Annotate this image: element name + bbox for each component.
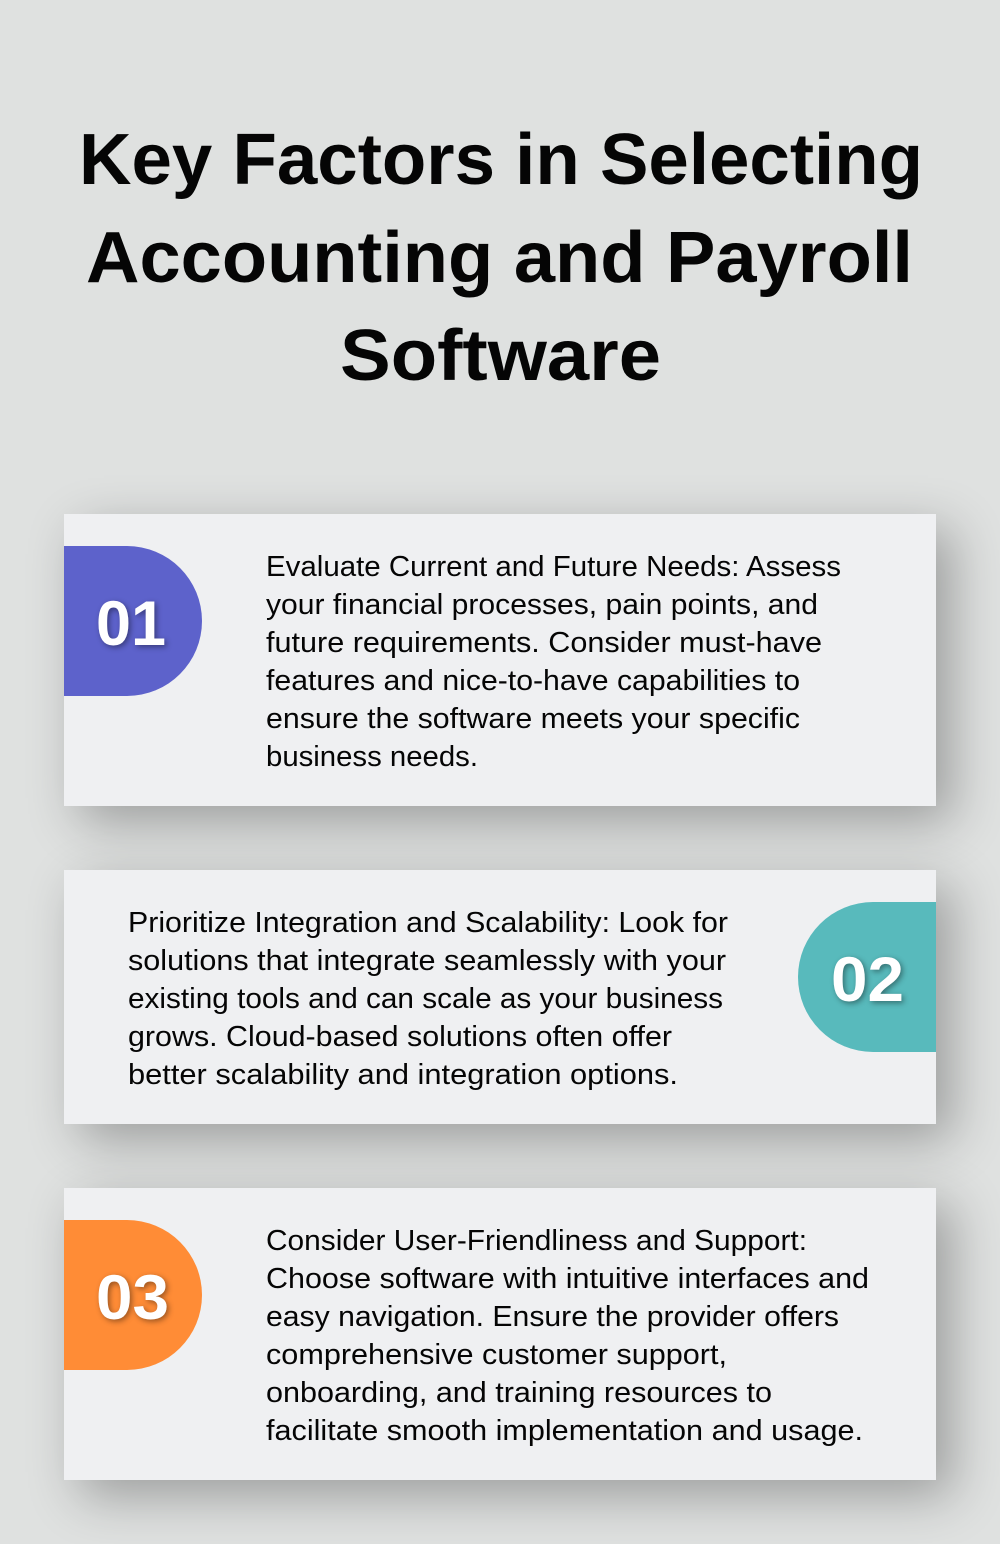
title: Software <box>340 316 661 396</box>
text: prioritize integration and scalability: existing tools and can scale as your business <box>128 983 723 1015</box>
text: evaluate current and future needs: ensure the software meets your specific <box>266 703 800 735</box>
text: prioritize integration and scalability: grows. Cloud-based solutions often offer <box>128 1021 673 1053</box>
badge: 03 <box>64 1220 202 1370</box>
text: consider user-friendliness and support: easy navigation. Ensure the provider offers <box>266 1301 839 1333</box>
text: consider user-friendliness and support: Consider User-Friendliness and Support: <box>266 1225 807 1257</box>
text: consider user-friendliness and support: comprehensive customer support, <box>266 1339 727 1371</box>
text: evaluate current and future needs: features and nice-to-have capabilities to <box>266 665 800 697</box>
title: Accounting and Payroll <box>86 218 913 298</box>
text: evaluate current and future needs: future requirements. Consider must-have <box>266 627 822 659</box>
text: prioritize integration and scalability: better scalability and integration options. <box>128 1059 678 1091</box>
text: consider user-friendliness and support: facilitate smooth implementation and usage. <box>266 1415 863 1447</box>
text: consider user-friendliness and support <box>266 1225 869 1447</box>
text: evaluate current and future needs: Evaluate Current and Future Needs: Assess <box>266 551 841 583</box>
text: evaluate current and future needs: your financial processes, pain points, and <box>266 589 818 621</box>
badge: 02: 02 <box>831 945 904 1015</box>
badge: 01: 01 <box>96 589 166 659</box>
text: prioritize integration and scalability: Prioritize Integration and Scalability: Look for <box>128 907 729 939</box>
panel: factor 01 <box>64 514 936 806</box>
text: prioritize integration and scalability <box>128 907 729 1091</box>
text: consider user-friendliness and support: Choose software with intuitive interfaces and <box>266 1263 869 1295</box>
title <box>79 120 923 396</box>
badge: 02 <box>798 902 936 1052</box>
panel: factor 03 <box>64 1188 936 1480</box>
text: evaluate current and future needs: business needs. <box>266 741 478 773</box>
text: evaluate current and future needs <box>266 551 841 773</box>
badge: 03: 03 <box>96 1263 169 1333</box>
text: prioritize integration and scalability: solutions that integrate seamlessly with your <box>128 945 727 977</box>
text: consider user-friendliness and support: onboarding, and training resources to <box>266 1377 772 1409</box>
title: Key Factors in Selecting <box>79 120 923 200</box>
badge: 01 <box>64 546 202 696</box>
panel: factor 02 <box>64 870 936 1124</box>
